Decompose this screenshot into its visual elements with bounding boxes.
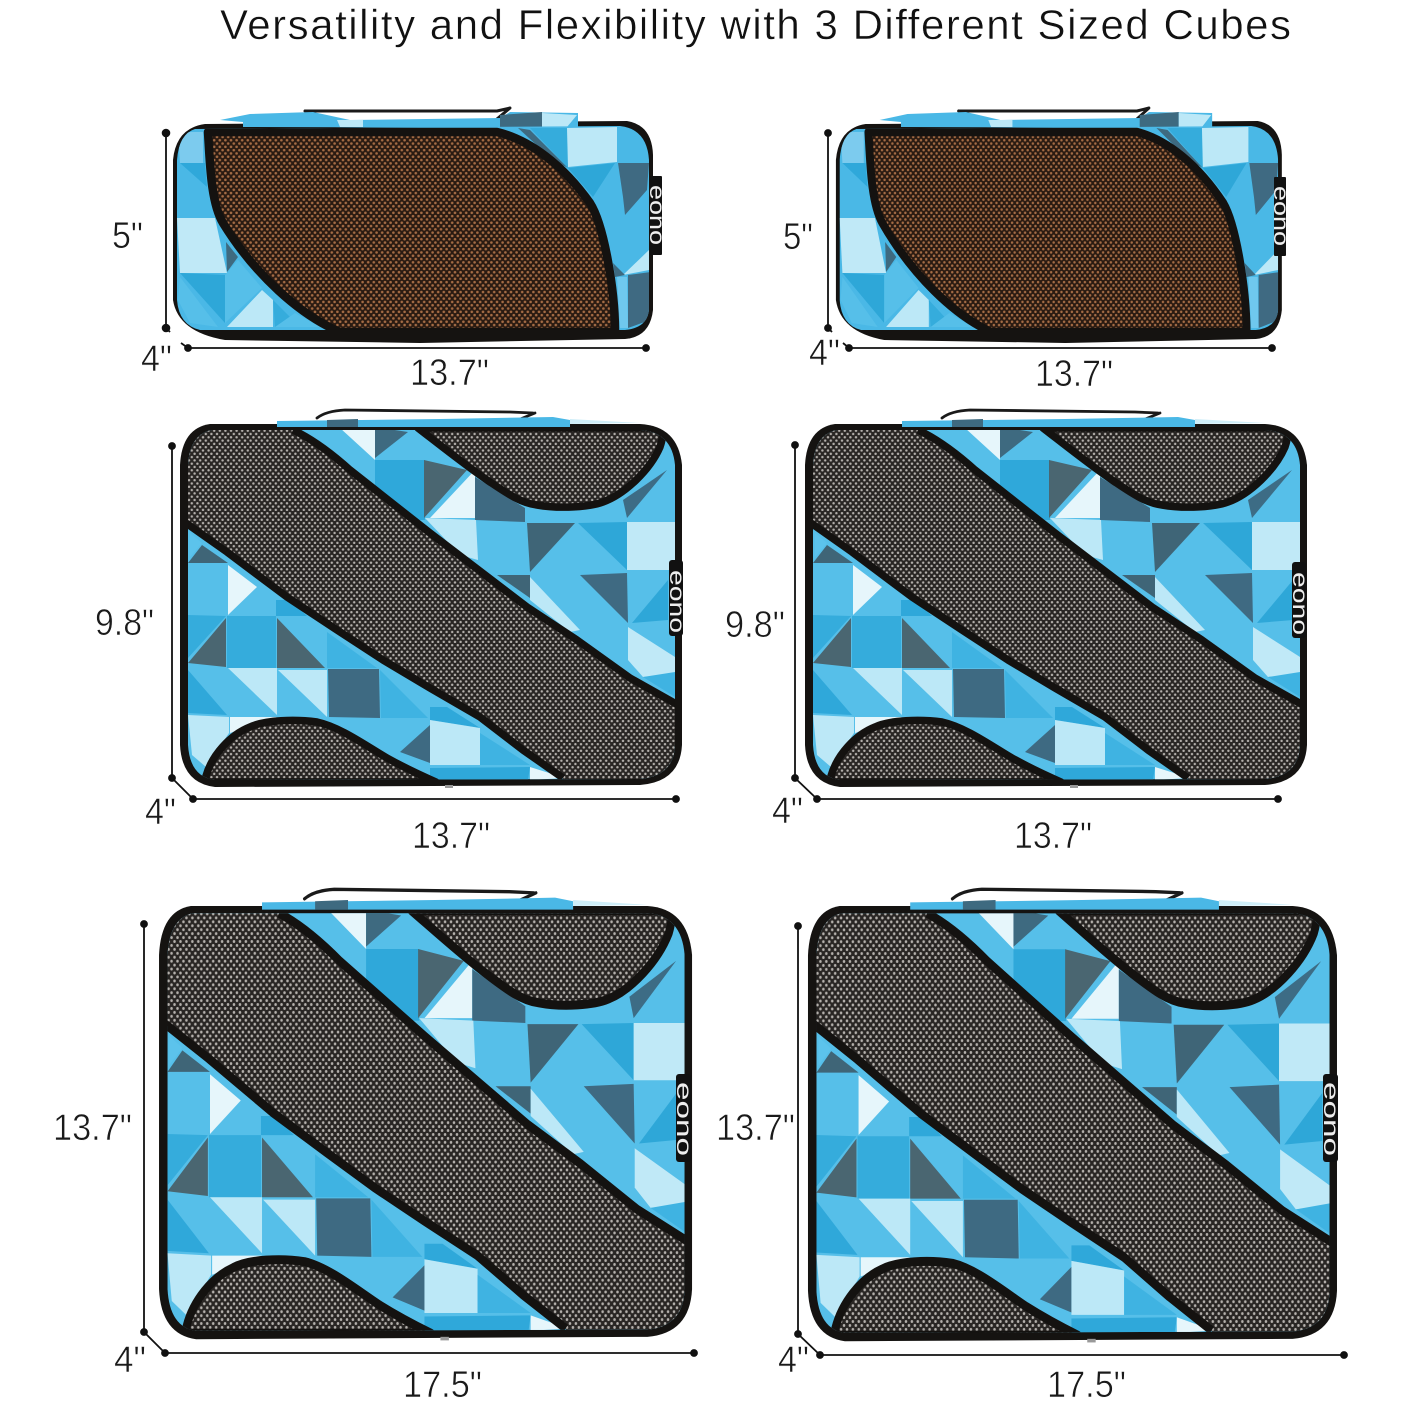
height label: 9.8" [95,602,154,643]
height label: 13.7" [53,1107,132,1148]
dimension lines [169,443,679,802]
panel: large cube, left [53,889,697,1401]
height label: 9.8" [725,604,785,645]
title: Versatility and Flexibility with 3 Different Sized Cubes [220,1,1291,48]
depth label: 4" [809,332,840,373]
dimension lines [792,442,1281,802]
brand tag: eono [1288,572,1311,635]
height label: 13.7" [716,1107,795,1148]
cube illustration: medium with grey mesh [180,410,682,788]
brand tag: eono [665,570,688,633]
depth label: 4" [114,1339,146,1380]
depth label: 4" [145,791,176,832]
brand tag: eono [1319,1082,1342,1156]
brand tag [672,1074,695,1162]
dimension lines [163,130,649,351]
cube illustration: large with grey mesh [808,889,1337,1342]
brand tag: eono [1269,186,1292,246]
cube illustration: medium with grey mesh [805,410,1307,788]
brand tag [645,176,668,255]
brand tag [1319,1074,1342,1162]
panel: medium cube, left [95,410,688,856]
width label: 13.7" [412,815,490,856]
panel: small cube, left [112,108,668,393]
width label: 13.7" [1035,353,1113,394]
panel: small cube, right [783,108,1292,394]
brand tag [665,560,688,636]
depth label: 4" [141,338,172,379]
brand tag: eono [672,1082,695,1156]
brand tag [1269,177,1292,256]
depth label: 4" [778,1339,809,1380]
panel: medium cube, right [725,410,1311,856]
dimension lines [825,130,1275,351]
panel: large cube, right [716,889,1347,1401]
dimension lines [795,923,1347,1358]
cube illustration: large with grey mesh [159,889,692,1340]
dimension lines [141,921,697,1356]
cube illustration: small with brown mesh [173,108,653,343]
height label: 5" [112,215,143,256]
cube illustration: small with brown mesh [836,108,1282,343]
depth label: 4" [772,790,803,831]
height label: 5" [783,216,813,257]
width label: 13.7" [410,352,489,393]
width label: 13.7" [1014,815,1092,856]
brand tag: eono [645,185,668,245]
brand tag [1288,562,1311,638]
